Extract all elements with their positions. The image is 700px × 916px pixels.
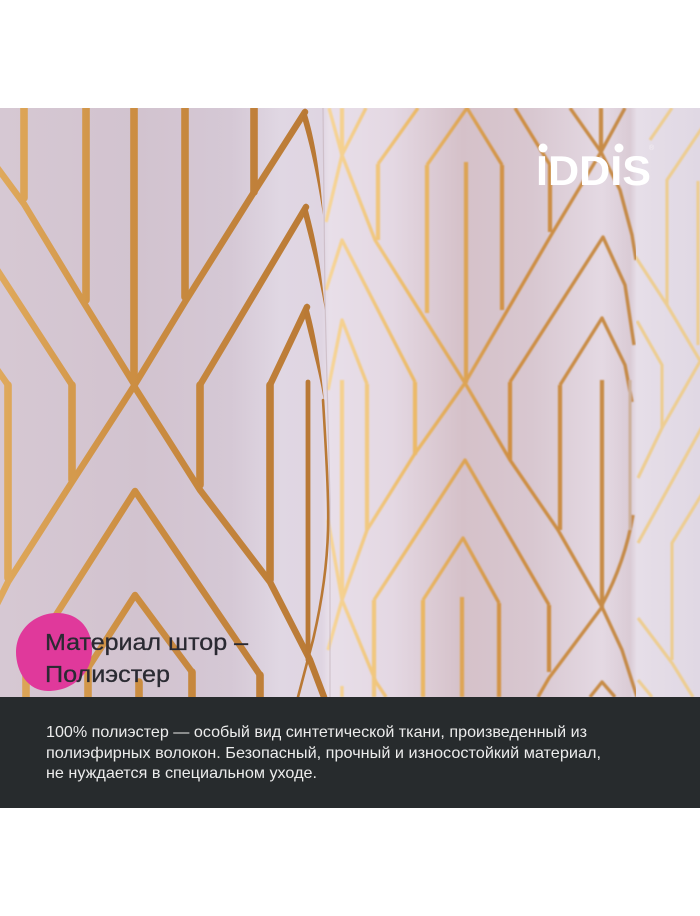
- diagonals: [0, 166, 134, 384]
- infographic canvas: [0, 108, 700, 808]
- diagonals: [329, 108, 637, 697]
- description text: 100% полиэстер — особый вид синтетической ткани, произведенный из: [46, 724, 587, 741]
- right curtain fold pattern: [635, 108, 700, 697]
- description text: не нуждается в специальном уходе.: [46, 765, 317, 782]
- heading: material of curtains: Полиэстер: [45, 661, 170, 687]
- middle curtain fold pattern: [326, 108, 637, 697]
- heading blob: pink accent: [16, 613, 92, 691]
- verticals: [342, 108, 602, 697]
- brand logo: IDDIS: ®: [649, 144, 655, 152]
- description text: полиэфирных волокон. Безопасный, прочный и износостойкий материал,: [46, 745, 601, 762]
- description text: [46, 724, 601, 782]
- brand logo: IDDIS: IDDIS: [536, 147, 651, 194]
- left fold tapered curve ends: [302, 108, 325, 402]
- left curtain fold pattern: [0, 108, 328, 700]
- heading: material of curtains: Материал штор –: [45, 629, 248, 655]
- dark description band: [0, 697, 700, 808]
- photo: curtain fabric with gold geometric pattern: [0, 108, 700, 700]
- verticals: [8, 108, 270, 700]
- fold shadow between left and middle panels: [323, 108, 330, 697]
- heading: material of curtains: [45, 629, 248, 687]
